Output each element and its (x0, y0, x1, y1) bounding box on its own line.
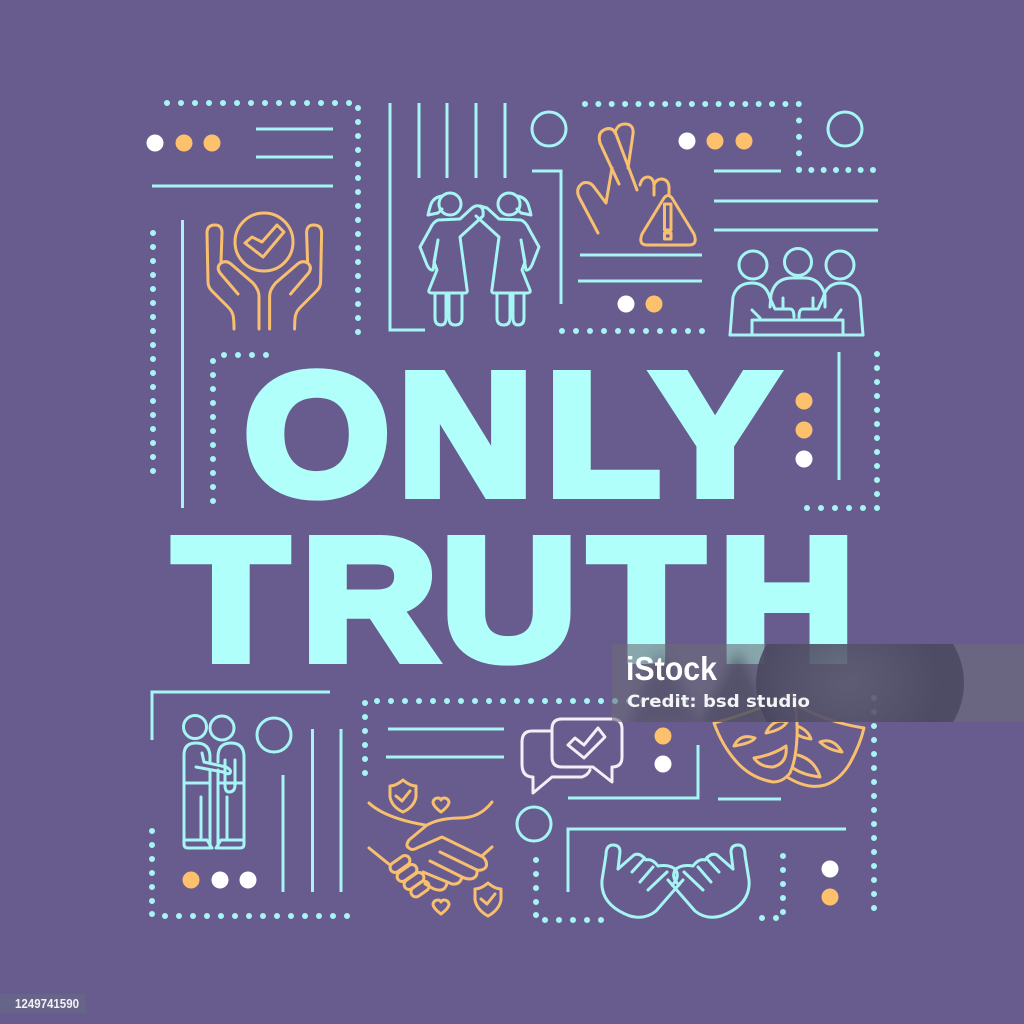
title (174, 338, 854, 696)
icon: three people at table (730, 248, 863, 335)
watermark: iStock logo: iStock (626, 650, 718, 687)
dots: beside chat (654, 728, 672, 772)
icon: crossed fingers with warning (578, 124, 695, 245)
icon: comedy and tragedy masks (714, 693, 864, 786)
watermark: credit: Credit: bsd studio (627, 692, 810, 712)
icon: open circles (257, 112, 862, 841)
image id tag (0, 994, 86, 1013)
icon: hands holding check (207, 213, 322, 329)
dots: top left (146, 134, 220, 152)
dots: below fingers (618, 296, 662, 312)
icon: handshake with shields and hearts (369, 780, 501, 916)
dots: right of title (796, 392, 812, 468)
dots: bottom left (182, 872, 256, 888)
image id tag: 1249741590 (15, 997, 79, 1011)
dots: top right (678, 132, 752, 150)
icon: two girls high five (420, 193, 539, 325)
watermark band (612, 644, 1024, 722)
icon: couple embracing (184, 716, 244, 848)
icon: pinky promise hands (602, 845, 749, 917)
title line: TRUTH: TRUTH (174, 503, 854, 696)
dots: bottom right (822, 860, 838, 906)
title line: ONLY: ONLY (244, 338, 777, 531)
icon: chat bubbles with check (522, 719, 622, 793)
